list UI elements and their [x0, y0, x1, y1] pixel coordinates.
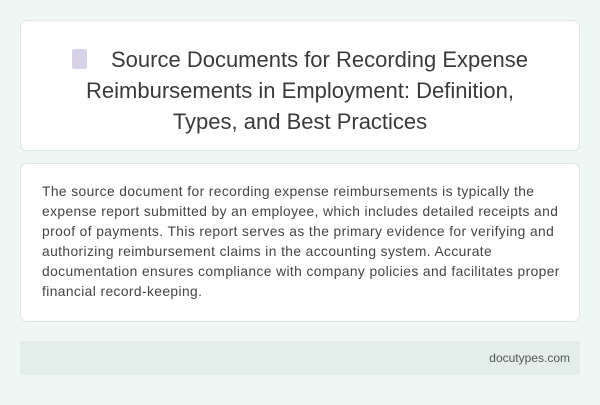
title — [72, 47, 528, 134]
text block — [42, 184, 560, 299]
text block: authorizing reimbursement claims in the accounting system. Accurate — [42, 244, 492, 259]
panel: title card — [20, 20, 580, 151]
icon: document — [72, 49, 87, 69]
footer text: docutypes.com — [489, 351, 570, 365]
text block: financial record-keeping. — [42, 284, 202, 299]
text block: proof of payments. This report serves as the primary evidence for verifying and — [42, 224, 554, 239]
text block: documentation ensures compliance with company policies and facilitates proper — [42, 264, 560, 279]
footer — [20, 341, 580, 375]
title: Types, and Best Practices — [173, 109, 427, 134]
text block: expense report submitted by an employee, which includes detailed receipts and — [42, 204, 558, 219]
panel: description — [20, 163, 580, 322]
title: Reimbursements in Employment: Definition, — [86, 78, 514, 103]
text block: The source document for recording expense reimbursements is typically the — [42, 184, 534, 199]
title: Source Documents for Recording Expense — [111, 47, 528, 72]
